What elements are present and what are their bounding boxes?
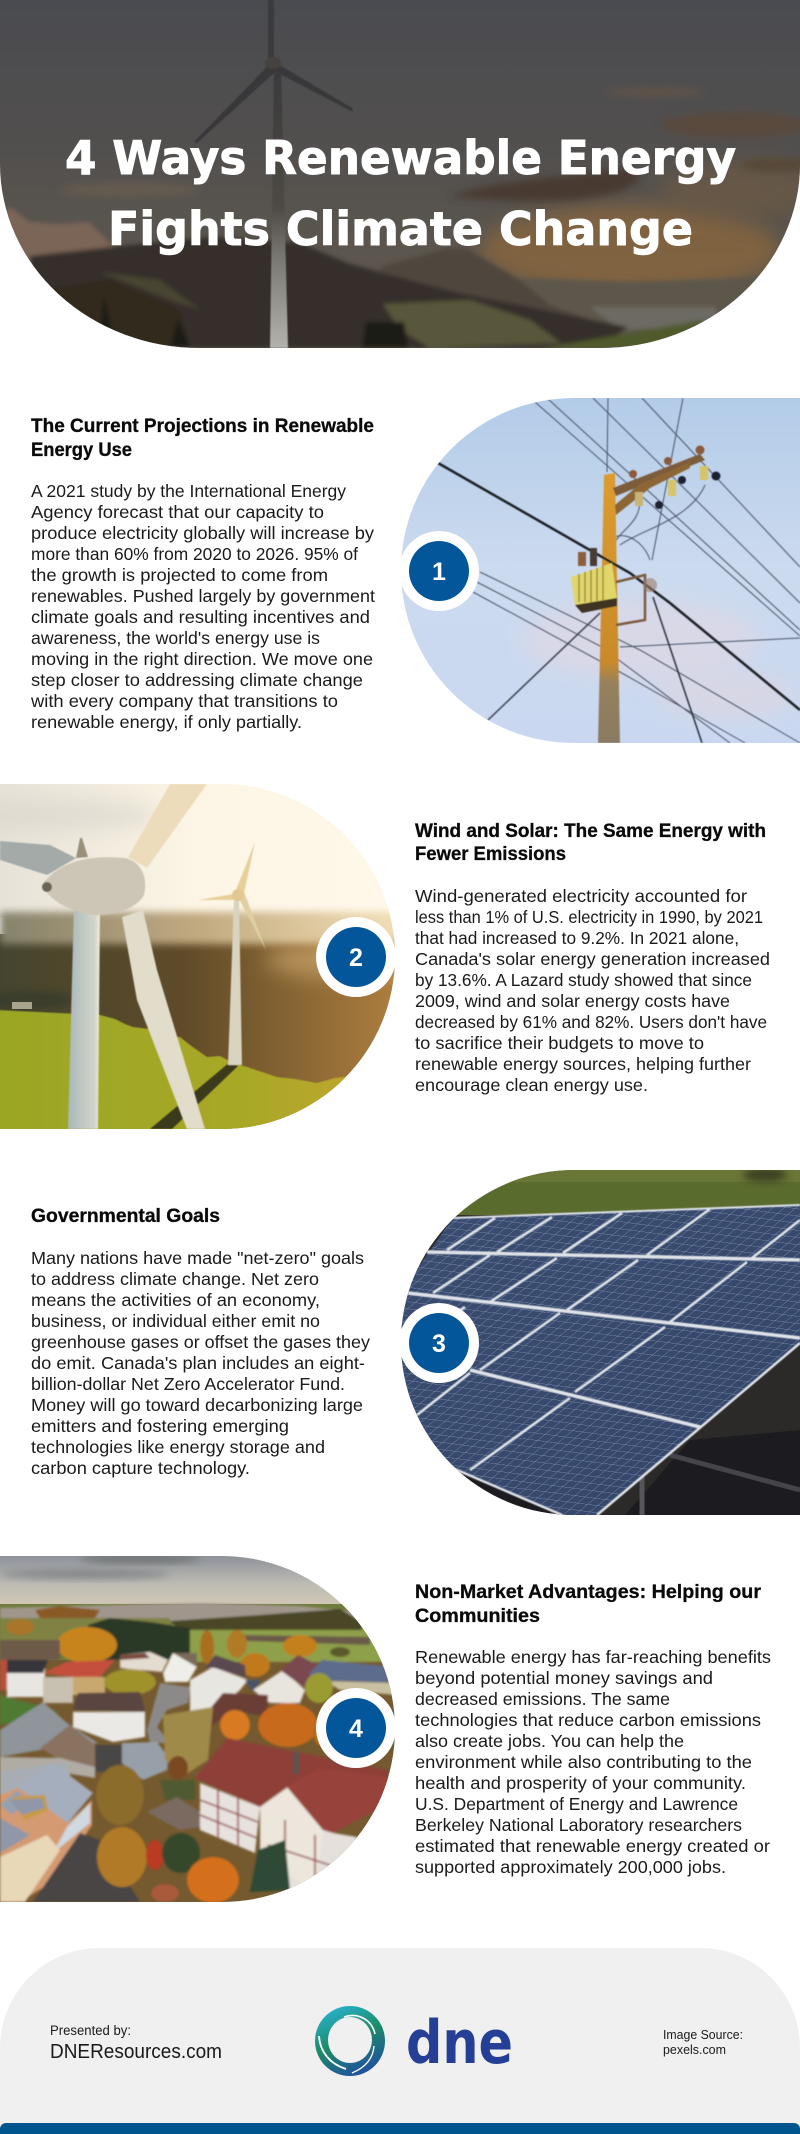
- section 2 body: Canada's solar energy generation increased: [415, 949, 770, 969]
- section 4 body: health and prosperity of your community.: [415, 1773, 746, 1793]
- title: 4 Ways Renewable Energy: [65, 131, 736, 185]
- section 1 body: A 2021 study by the International Energy: [31, 481, 346, 501]
- section 1 body: more than 60% from 2020 to 2026. 95% of: [31, 544, 358, 564]
- photo: village with autumn trees: [0, 1555, 400, 1904]
- photo: utility pole and wires: [400, 398, 800, 743]
- logo: dne ring and wordmark: dne: [406, 2008, 513, 2078]
- section 4 body: beyond potential money savings and: [415, 1668, 713, 1688]
- section 3 body: technologies like energy storage and: [31, 1437, 325, 1457]
- section 3 body: business, or individual either emit no: [31, 1311, 320, 1331]
- title: Fights Climate Change: [108, 202, 693, 256]
- section 4 text: [415, 1582, 771, 1877]
- logo: dne ring and wordmark: [315, 2006, 513, 2078]
- section 2 heading: Fewer Emissions: [415, 844, 566, 865]
- number badge 4: 4: [349, 1715, 363, 1743]
- section 2 text: [415, 821, 770, 1095]
- section 2 body: encourage clean energy use.: [415, 1075, 648, 1095]
- section 1 body: moving in the right direction. We move one: [31, 649, 373, 669]
- hero wind turbine: [194, 0, 353, 348]
- section 1 body: awareness, the world's energy use is: [31, 628, 320, 648]
- presented by credit: Presented by:: [50, 2023, 131, 2038]
- image source credit: pexels.com: [663, 2043, 726, 2057]
- section 4 body: U.S. Department of Energy and Lawrence: [415, 1794, 738, 1814]
- section 4 body: Berkeley National Laboratory researchers: [415, 1815, 742, 1835]
- section 3 body: do emit. Canada's plan includes an eight-: [31, 1353, 365, 1373]
- footer panel: [0, 1948, 800, 2134]
- section 2 body: renewable energy sources, helping further: [415, 1054, 751, 1074]
- section 1 body: step closer to addressing climate change: [31, 670, 363, 690]
- section 2 heading: Wind and Solar: The Same Energy with: [415, 821, 766, 842]
- section 3 body: Money will go toward decarbonizing large: [31, 1395, 363, 1415]
- section 1 text: [30, 416, 375, 732]
- number badge 1: [399, 531, 479, 611]
- number badge 3: 3: [432, 1330, 446, 1358]
- section 1 heading: [31, 416, 374, 461]
- section 3 body: billion-dollar Net Zero Accelerator Fund.: [31, 1374, 345, 1394]
- title: [65, 131, 736, 256]
- section 4 heading: Non-Market Advantages: Helping our: [415, 1582, 762, 1603]
- number badge 1: 1: [432, 558, 446, 586]
- section 4 heading: Communities: [415, 1606, 540, 1627]
- section 1 heading: The Current Projections in Renewable: [31, 416, 374, 437]
- photo: wind turbines over field at sunset: [0, 784, 425, 1135]
- section 4 body: supported approximately 200,000 jobs.: [415, 1857, 726, 1877]
- section 2 body: by 13.6%. A Lazard study showed that since: [415, 970, 752, 990]
- number badge 3: [399, 1303, 479, 1383]
- section 4 body: [415, 1647, 771, 1877]
- presented by credit: [50, 2023, 222, 2063]
- section 1 body: Agency forecast that our capacity to: [31, 502, 324, 522]
- section 4 body: estimated that renewable energy created or: [415, 1836, 770, 1856]
- section 4 heading: [415, 1582, 762, 1627]
- section 1 body: climate goals and resulting incentives and: [31, 607, 370, 627]
- image source credit: [663, 2028, 743, 2057]
- photo: solar panel array: [395, 1168, 800, 1515]
- section 3 body: Many nations have made "net-zero" goals: [31, 1248, 364, 1268]
- section 1 body: the growth is projected to come from: [31, 565, 328, 585]
- section 1 body: renewables. Pushed largely by government: [31, 586, 375, 606]
- section 3 body: means the activities of an economy,: [31, 1290, 320, 1310]
- section 1 body: produce electricity globally will increase by: [31, 523, 374, 543]
- section 4 body: decreased emissions. The same: [415, 1689, 670, 1709]
- section 3 body: to address climate change. Net zero: [31, 1269, 319, 1289]
- section 2 body: to sacrifice their budgets to move to: [415, 1033, 704, 1053]
- section 3 body: carbon capture technology.: [31, 1458, 250, 1478]
- section 2 heading: [415, 821, 766, 865]
- hero banner: [0, 0, 800, 348]
- section 2 body: [415, 886, 770, 1095]
- image source credit: Image Source:: [663, 2028, 743, 2042]
- presented by credit: DNEResources.com: [50, 2041, 222, 2063]
- section 2 body: decreased by 61% and 82%. Users don't have: [415, 1012, 767, 1032]
- section 1 heading: Energy Use: [31, 440, 132, 461]
- section 1 body: renewable energy, if only partially.: [31, 712, 302, 732]
- section 2 body: less than 1% of U.S. electricity in 1990, by 2021: [415, 907, 763, 927]
- section 1 body: with every company that transitions to: [30, 691, 338, 711]
- section 4 body: environment while also contributing to the: [415, 1752, 752, 1772]
- number badge 2: [316, 917, 396, 997]
- section 1 body: [30, 481, 375, 732]
- section 3 text: [31, 1206, 370, 1478]
- section 2 body: Wind-generated electricity accounted for: [415, 886, 747, 906]
- section 3 heading: Governmental Goals: [31, 1206, 220, 1227]
- number badge 2: 2: [349, 944, 363, 972]
- hero photo: wind turbine over mountains: [0, 0, 800, 348]
- section 4 body: technologies that reduce carbon emissions: [415, 1710, 761, 1730]
- section 2 body: 2009, wind and solar energy costs have: [415, 991, 730, 1011]
- number badge 4: [316, 1688, 396, 1768]
- section 4 body: Renewable energy has far-reaching benefits: [415, 1647, 771, 1667]
- section 4 body: also create jobs. You can help the: [415, 1731, 684, 1751]
- section 3 body: emitters and fostering emerging: [31, 1416, 289, 1436]
- section 3 body: [31, 1248, 370, 1478]
- section 3 body: greenhouse gases or offset the gases they: [31, 1332, 370, 1352]
- section 2 body: that had increased to 9.2%. In 2021 alone,: [415, 928, 739, 948]
